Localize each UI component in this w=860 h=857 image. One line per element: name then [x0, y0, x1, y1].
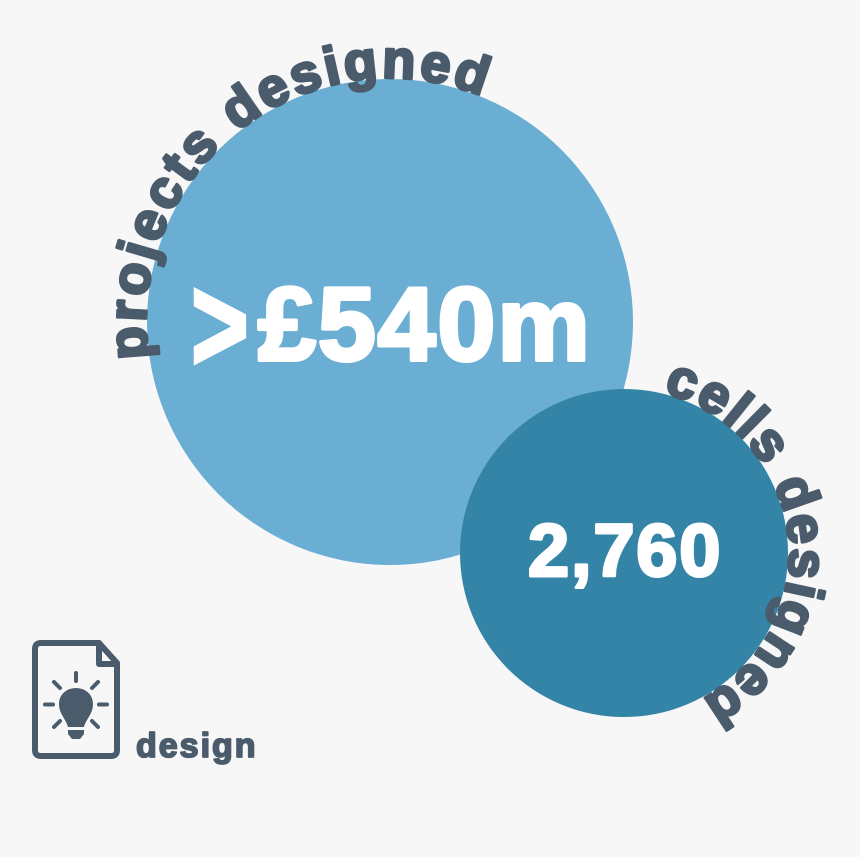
- small circle: [460, 389, 788, 717]
- large circle: [147, 79, 633, 565]
- value: project total: >: [191, 250, 249, 401]
- value: cells total: 2,760: [528, 509, 722, 592]
- label: design: design: [136, 727, 258, 765]
- icon: document with light bulb: [35, 643, 117, 756]
- value: project total: [191, 250, 592, 401]
- curved label: projects designed: projects designed: [115, 44, 493, 358]
- curved label: cells designed: cells designed: [667, 368, 826, 732]
- value: project total: £540m: [258, 267, 592, 383]
